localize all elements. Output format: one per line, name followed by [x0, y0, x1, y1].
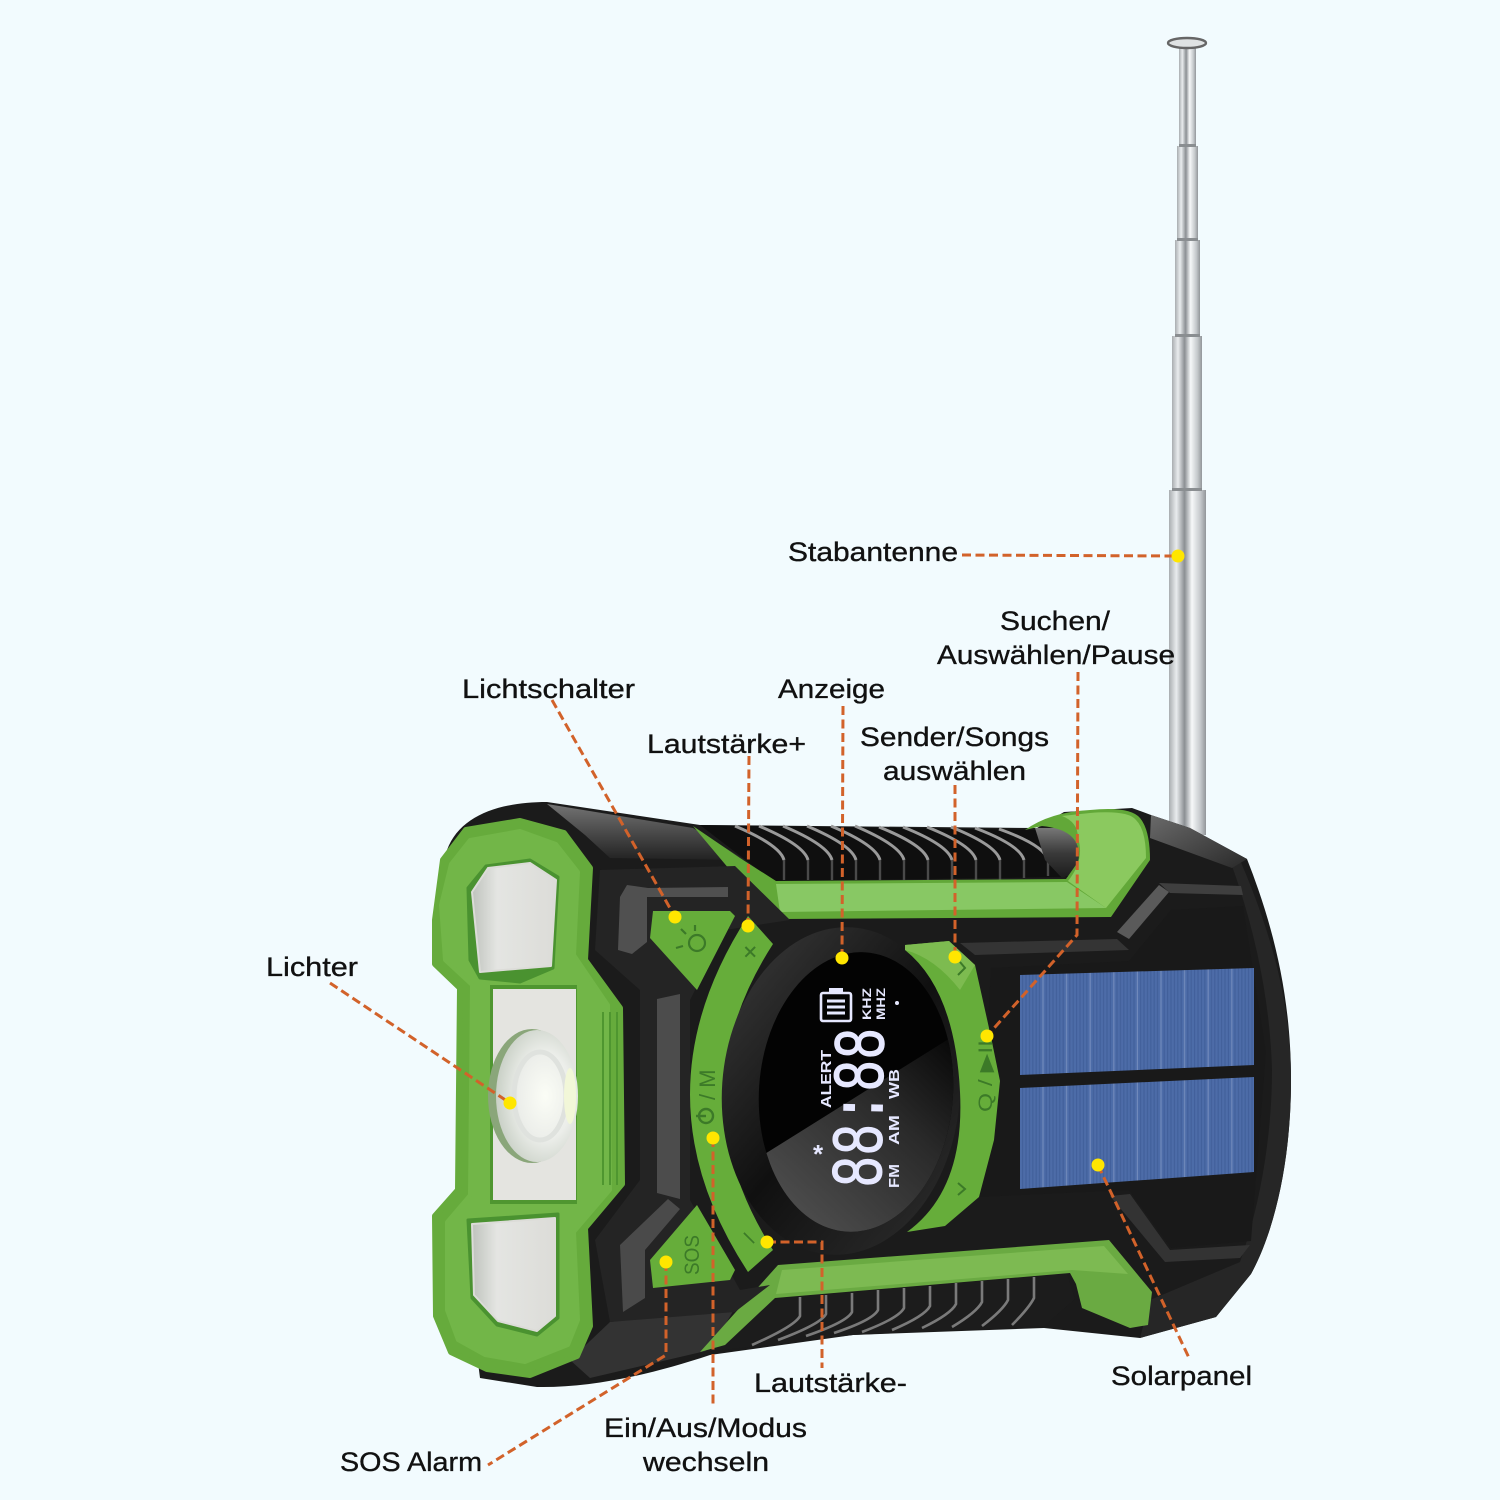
callout: Anzeige [778, 674, 885, 964]
LCD labels [813, 988, 903, 1188]
button: SOS [650, 1205, 735, 1288]
callout: Lautstärke+: Lautstärke+ [647, 729, 806, 759]
LCD labels: MHZ [874, 988, 888, 1020]
callout: Stabantenne: Stabantenne [788, 537, 958, 567]
LCD labels: AM [886, 1115, 903, 1145]
top green band [693, 809, 1150, 919]
radio body shell [447, 802, 1291, 1387]
callout: Lichtschalter [462, 674, 682, 924]
shell lower-left surface [570, 1308, 735, 1378]
callout: Anzeige: Anzeige [778, 674, 885, 704]
facet: lower left [620, 1199, 680, 1312]
callout: Ein/Aus/Modus wechseln: wechseln [642, 1447, 769, 1477]
bottom light window [468, 1214, 558, 1335]
button: left arc volume and mode [690, 916, 773, 1272]
button: left arc volume and mode: / M [695, 1069, 720, 1100]
callout: Suchen/Auswählen/Pause: Suchen/ [1000, 606, 1111, 636]
button: left arc volume and mode: – [735, 1221, 767, 1252]
callout: Solarpanel [1092, 1158, 1252, 1391]
left green bumper [435, 821, 622, 1375]
LCD labels: KHZ [860, 988, 874, 1020]
button: left arc volume and mode: + [734, 935, 767, 968]
right panel around solar [979, 906, 1266, 1248]
button: light switch [650, 911, 735, 990]
facet: middle left [657, 994, 680, 1199]
facets: upper right [960, 883, 1250, 1262]
left face panel [595, 866, 790, 1322]
solar panel [1020, 968, 1254, 1189]
LCD labels: WB [886, 1069, 903, 1099]
LCD digits: 88:88 [820, 1027, 906, 1188]
callout: Lautstärke+ [647, 729, 806, 932]
callout: Sender/Songs auswählen [860, 722, 1049, 964]
icon: telescopic antenna [1168, 38, 1206, 835]
battery icon [821, 988, 851, 1021]
shell top-right surface [1150, 815, 1247, 868]
callout: Ein/Aus/Modus wechseln: Ein/Aus/Modus [604, 1413, 807, 1443]
callout: Sender/Songs auswählen: auswählen [883, 756, 1026, 786]
callout: SOS Alarm [340, 1256, 672, 1477]
callout: Lautstärke- [754, 1236, 907, 1398]
shell right-hand rim [1140, 860, 1291, 1338]
display screen [758, 952, 954, 1232]
callout: Suchen/Auswählen/Pause: Auswählen/Pause [937, 640, 1175, 670]
LCD labels: ALERT [818, 1050, 835, 1108]
button: SOS: SOS [681, 1235, 704, 1275]
LCD labels: * [813, 1139, 824, 1169]
callout: Lichter: Lichter [266, 952, 358, 982]
shell top-left surface [547, 804, 745, 860]
bottom ridged grip [704, 1274, 1075, 1352]
callout: Ein/Aus/Modus wechseln [604, 1132, 807, 1477]
top light window [468, 860, 558, 982]
radio device [435, 802, 1291, 1387]
callout: Sender/Songs auswählen: Sender/Songs [860, 722, 1049, 752]
callout: Lichter [266, 952, 516, 1110]
facet: upper left [618, 885, 728, 954]
top ridged grip [700, 825, 1078, 881]
display bezel [711, 919, 971, 1263]
callout: Stabantenne [788, 537, 1184, 567]
callout: Suchen/Auswählen/Pause [937, 606, 1175, 1042]
button: right arc tuning [905, 941, 1000, 1232]
button: right arc tuning: Q / ▶II [976, 1040, 997, 1112]
callout: SOS Alarm: SOS Alarm [340, 1447, 482, 1477]
flashlight lens [488, 1029, 578, 1163]
middle light window [490, 985, 577, 1204]
callout: Solarpanel: Solarpanel [1111, 1361, 1252, 1391]
LCD labels: FM [886, 1164, 903, 1188]
bumper grooves [603, 1012, 617, 1185]
callout: Lichtschalter: Lichtschalter [462, 674, 635, 704]
bottom green band [700, 1240, 1152, 1352]
callout: Lautstärke-: Lautstärke- [754, 1368, 907, 1398]
